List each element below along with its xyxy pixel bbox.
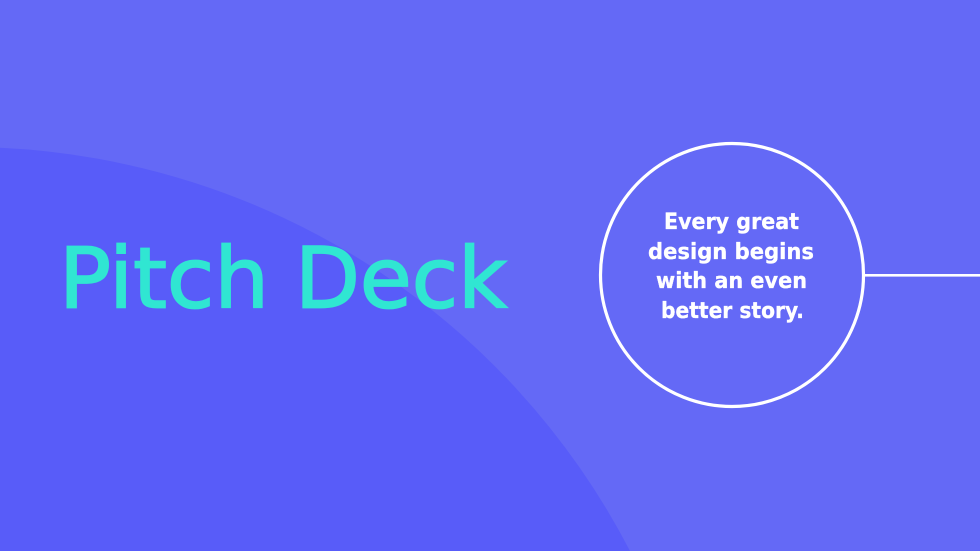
quote text: Every great [664,210,799,235]
circle outline [600,144,864,406]
quote text: design begins [648,240,814,265]
large darker circle shape [0,148,630,551]
quote text: with an even [656,269,807,294]
title: Pitch [59,230,269,328]
quote text: better story. [661,299,804,324]
title: Deck [295,230,507,328]
quote circle with text [600,144,864,406]
quote text [648,210,814,324]
title [59,230,507,328]
connector line [865,274,980,277]
